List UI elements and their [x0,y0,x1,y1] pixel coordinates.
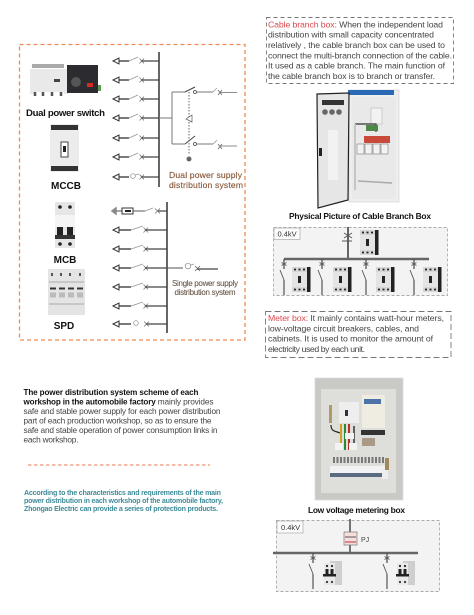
text block: protection products: Zhongao Electric can provide a series of protection products. [24,505,218,513]
diagram: single power supply [112,202,218,333]
text block: workshop scheme: safe and stable operation of power consumption links in [24,425,218,435]
text block: workshop scheme: part of each production workshop, so as to ensure the [24,416,212,426]
label: MCCB: MCCB [51,181,81,192]
label: single power supply: distribution system [174,288,236,297]
diagram: cable branch wiring: 0.4kV [278,230,297,238]
icon: SPD [48,269,85,315]
callout: cable branch box: relatively , the cable branch box can be used to [268,40,445,50]
diagram: cable branch wiring [274,227,448,296]
label: single power supply: Single power supply [172,279,238,288]
diagram: metering wiring: PJ [361,537,369,544]
diagram: metering wiring [273,519,440,592]
diagram: metering wiring: 0.4kV [281,523,300,532]
icon: dual power switch [30,64,101,97]
callout: cable branch box: the cable branch box is to branch or transfer. [268,71,435,81]
label: dual power supply: distribution system [169,180,243,190]
caption: cable branch box photo: Physical Picture of Cable Branch Box [289,211,431,221]
caption: low voltage metering box: Low voltage metering box [308,505,405,515]
text block: workshop scheme [22,387,223,444]
callout: cable branch box: Cable branch box: When the independent load [268,20,443,30]
panel: distribution systems [20,44,245,340]
callout: cable branch box [266,18,454,84]
label: MCB: MCB [54,255,76,266]
callout: cable branch box: distribution with small capacity concentrated [268,30,434,40]
text block: workshop scheme: safe and stable power supply for each power distribution [24,406,221,416]
label: dual power switch: Dual power switch [26,108,105,119]
diagram: dual power supply [113,52,237,187]
callout: meter box [266,312,451,358]
label: SPD: SPD [54,321,74,332]
label: dual power supply: Dual power supply [169,170,243,180]
text block: workshop scheme: The power distribution system scheme of each [24,388,199,397]
icon: MCB [55,202,75,248]
text block: protection products: power distribution in each workshop of the automobile factory, [24,497,223,505]
icon: MCCB [50,124,79,172]
callout: meter box: Meter box: It mainly contains watt-hour meters, [268,313,444,323]
photo: low voltage metering box [315,378,403,500]
text block: protection products [24,489,225,513]
callout: meter box: low-voltage circuit breakers, cables, and [268,323,419,333]
callout: cable branch box: It used as a cable branch. The main function of [268,61,446,71]
callout: meter box: electricity used by each unit. [268,344,365,354]
text block: workshop scheme: workshop in the automobile factory mainly provides [24,396,214,406]
text block: workshop scheme: each workshop. [24,434,78,444]
text block: protection products: According to the characteristics and requirements of the main [24,489,221,497]
callout: cable branch box: connect the multi-branch connection of the cable. [268,50,452,60]
callout: meter box: cabinets. It is used to monitor the amount of [268,334,434,344]
photo: cable branch cabinet [317,90,399,208]
